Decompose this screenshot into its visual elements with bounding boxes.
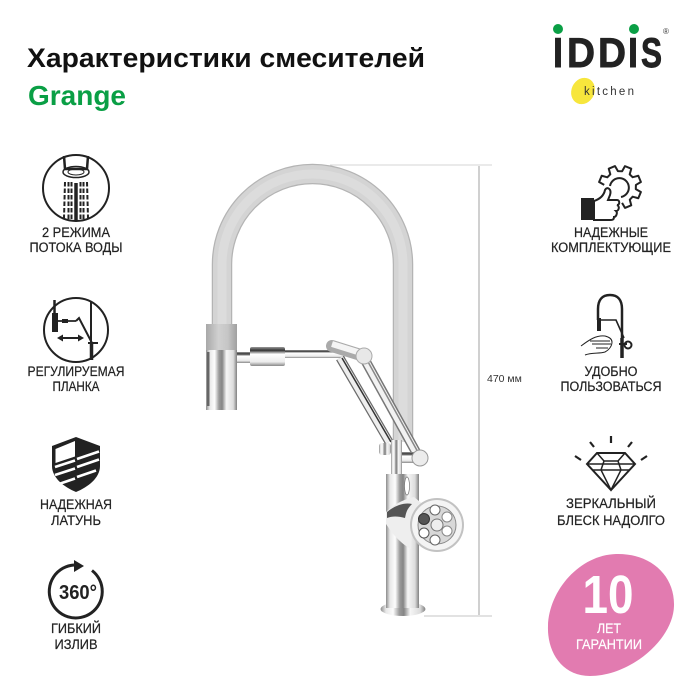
label: 2 РЕЖИМА [42, 225, 110, 240]
logo: IDDIS kitchen: kitchen [584, 86, 634, 98]
icon: diamond with sparkle rays [575, 436, 647, 490]
logo: IDDIS kitchen: I [553, 29, 563, 76]
logo: IDDIS kitchen: D [598, 29, 626, 76]
icon: aerator with water streams [43, 155, 109, 221]
faucet body and base [379, 440, 428, 616]
label: БЛЕСК НАДОЛГО [557, 513, 665, 528]
label [551, 225, 671, 255]
label [557, 496, 665, 528]
logo: IDDIS kitchen: I [628, 29, 638, 76]
flexible hose [222, 174, 403, 442]
subtitle: model name: Grange [28, 80, 126, 111]
label: ГИБКИЙ [51, 621, 101, 636]
icon: faucet and hand [581, 295, 632, 358]
label: НАДЕЖНЫЕ [574, 225, 648, 240]
icon: gear and thumbs up [581, 159, 648, 220]
feature: 2 flow modes [30, 155, 122, 255]
label: УДОБНО [584, 364, 638, 379]
feature: reliable brass [40, 437, 112, 528]
linkage rods [332, 344, 419, 454]
label: ПОТОКА ВОДЫ [30, 240, 122, 255]
logo: IDDIS kitchen: D [567, 29, 595, 76]
faucet illustration [206, 174, 464, 616]
warranty label [576, 621, 642, 652]
label: ЛАТУНЬ [51, 513, 101, 528]
warranty label: ЛЕТ [597, 621, 621, 636]
warranty years: 10 [582, 565, 634, 625]
title: Характеристики смесителей [27, 43, 425, 73]
logo: IDDIS kitchen: S [641, 29, 662, 76]
label [560, 364, 662, 394]
spray head [206, 324, 237, 410]
label: КОМПЛЕКТУЮЩИЕ [551, 240, 671, 255]
label [51, 621, 101, 652]
label: ЗЕРКАЛЬНЫЙ [566, 496, 656, 511]
icon: faucet with adjustment arrow [44, 298, 108, 362]
feature: mirror shine [557, 436, 665, 528]
label [28, 364, 124, 394]
horizontal arm [237, 347, 345, 366]
label [30, 225, 122, 255]
feature: flexible spout [49, 560, 102, 652]
logo: IDDIS kitchen [553, 24, 669, 108]
label: ПОЛЬЗОВАТЬСЯ [560, 379, 662, 394]
feature: reliable components [551, 159, 671, 255]
label: ИЗЛИВ [54, 637, 98, 652]
icon: 360 degree rotation: 360° [59, 582, 97, 604]
label: НАДЕЖНАЯ [40, 497, 112, 512]
icon: shield [52, 437, 100, 492]
logo: IDDIS kitchen: ® [663, 27, 669, 36]
warranty badge [548, 554, 674, 676]
feature: adjustable bar [28, 298, 124, 394]
label: РЕГУЛИРУЕМАЯ [28, 364, 124, 379]
feature: convenient to use [560, 295, 662, 394]
label [40, 497, 112, 528]
warranty label: ГАРАНТИИ [576, 637, 642, 652]
dimension line: height 470 mm: 470 мм [487, 373, 522, 385]
pink blob [548, 554, 674, 676]
handle wheel [410, 498, 464, 552]
label: ПЛАНКА [52, 379, 100, 394]
